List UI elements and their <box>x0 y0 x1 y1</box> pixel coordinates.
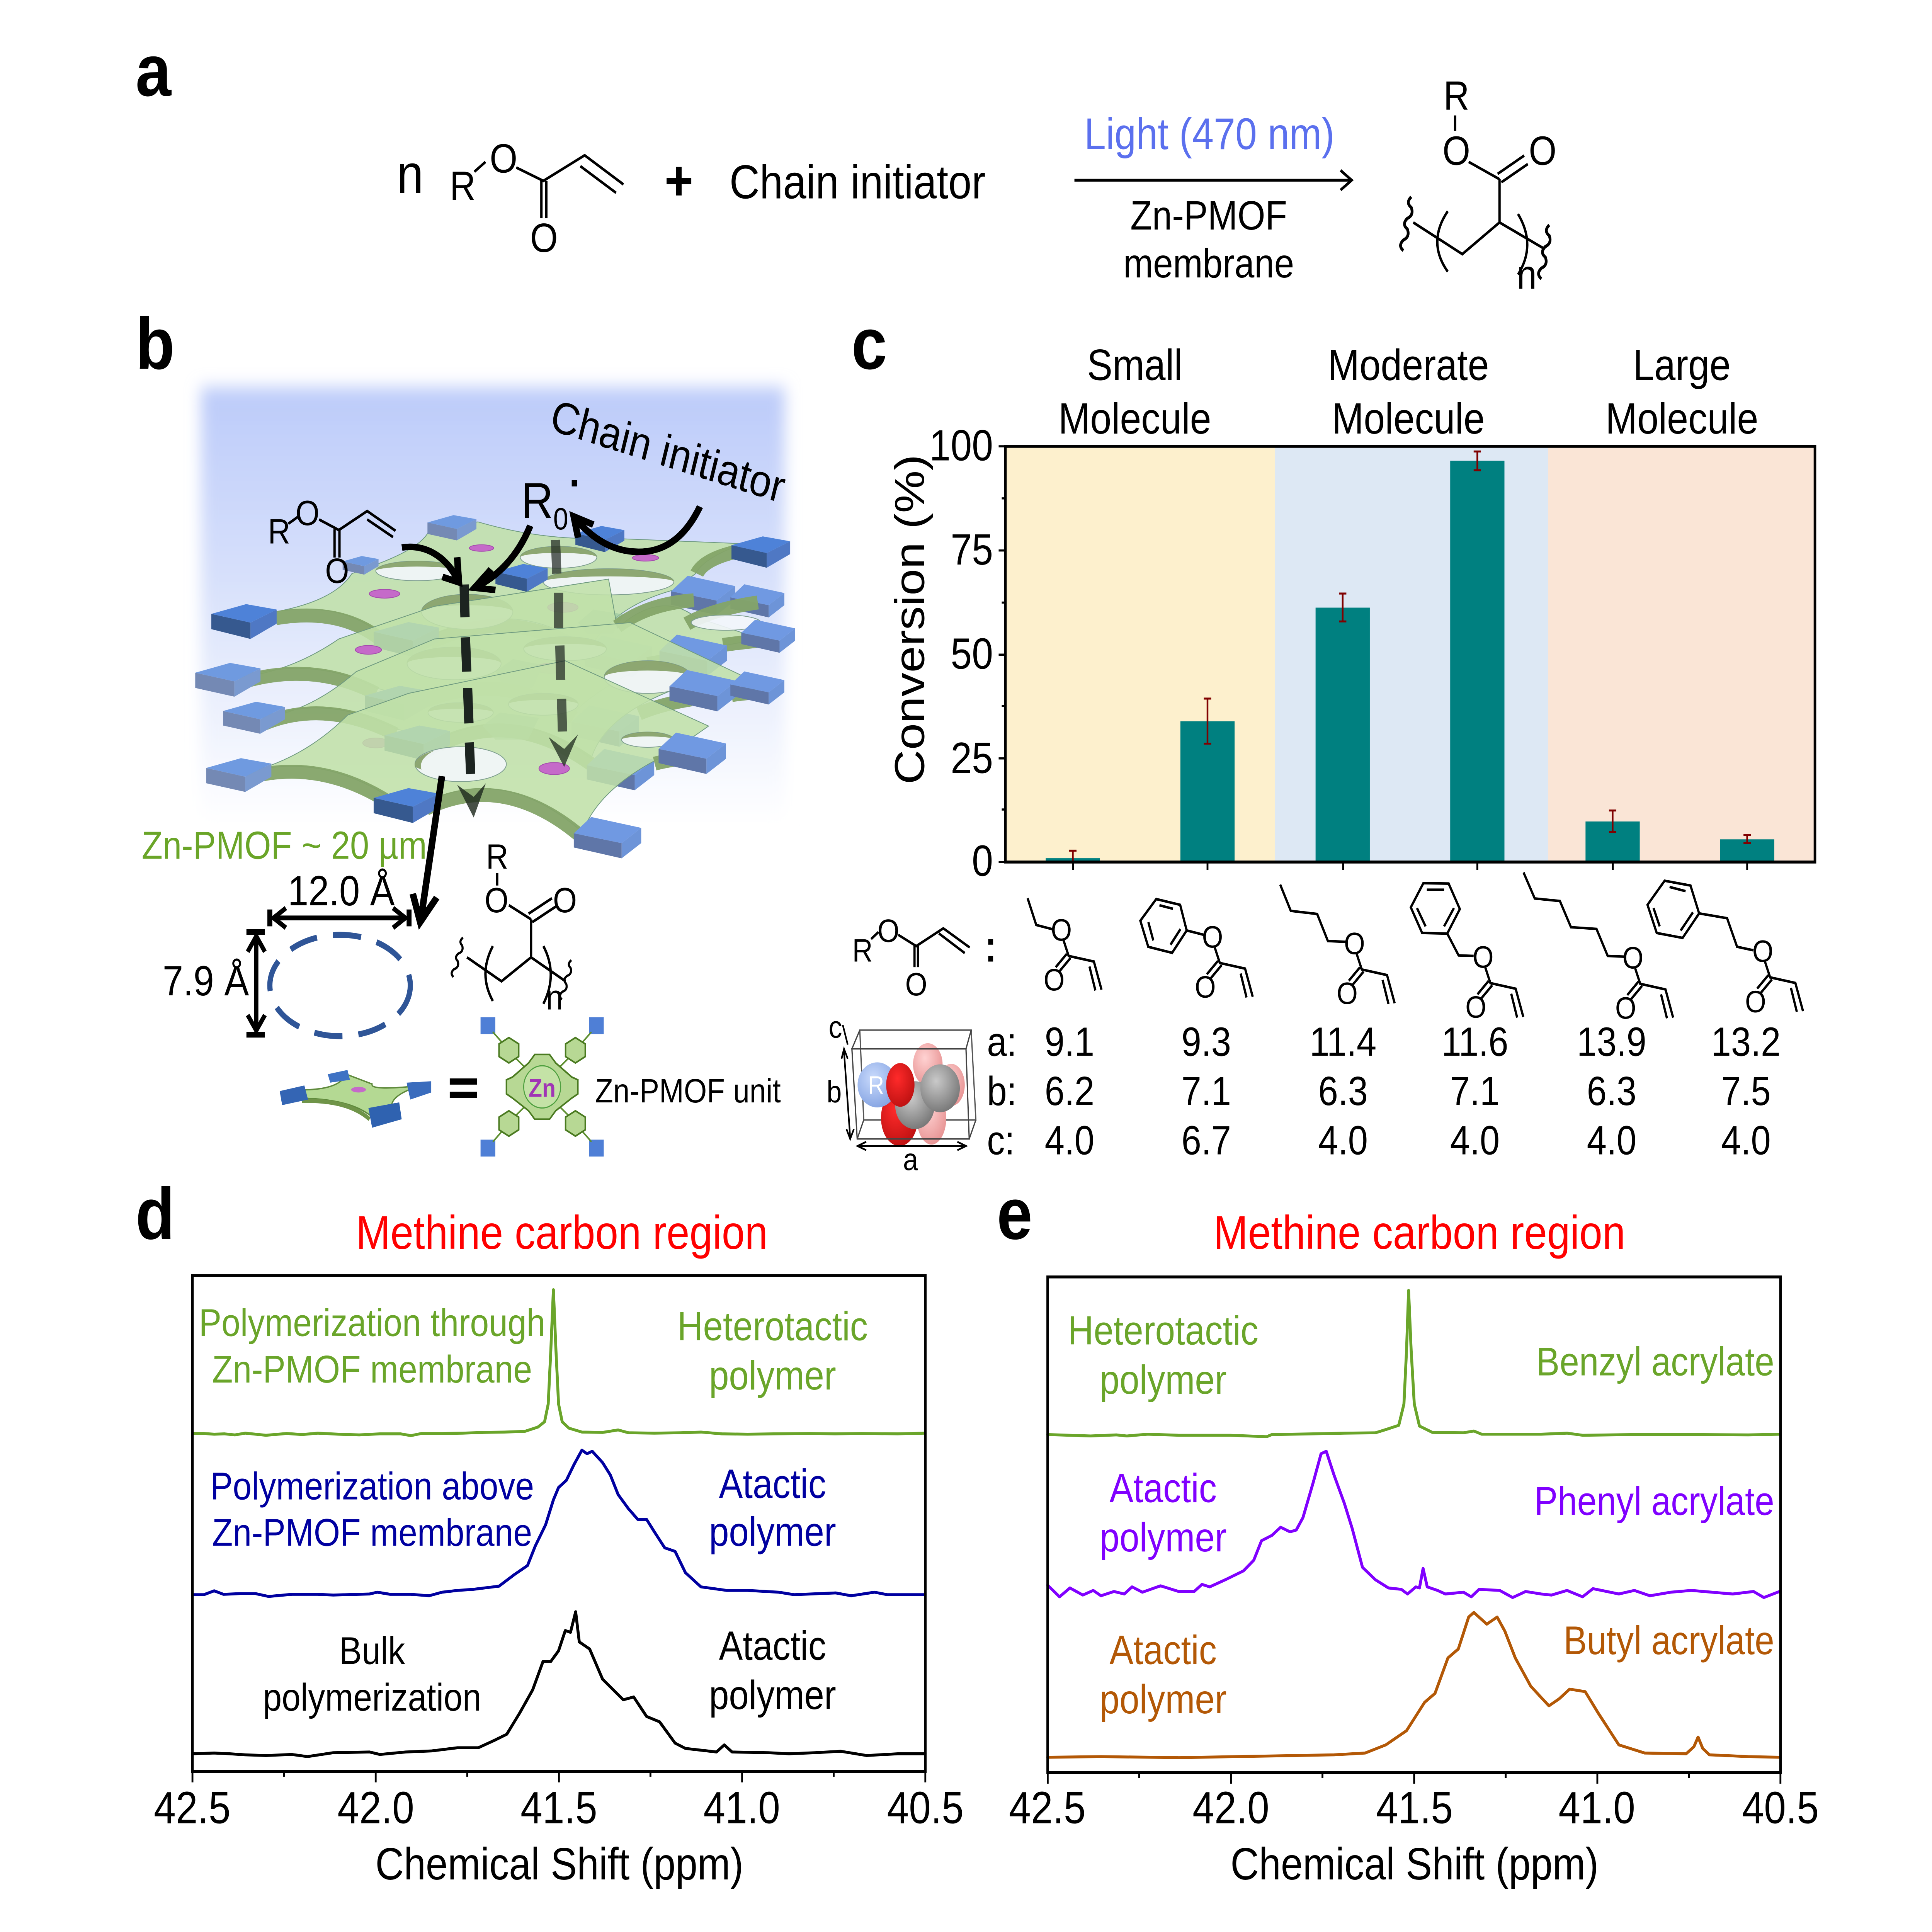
dashed pore outline <box>270 935 410 1036</box>
x axis tick labels: 41.5 <box>520 1783 597 1833</box>
polymer in pore structure <box>446 837 578 1017</box>
category heading: small molecule: Small <box>1087 341 1182 389</box>
unit cell model with space-filling atoms: a <box>903 1142 918 1177</box>
panel e title: Methine carbon region <box>1213 1206 1625 1259</box>
y axis title: Conversion (%) <box>886 454 933 784</box>
row a dimensions <box>987 1019 1781 1065</box>
panel c: conversion bar chart <box>886 341 1815 885</box>
sheet layer 3 <box>223 622 784 790</box>
initiator radical R0: R <box>521 473 553 529</box>
row c dimensions: c: <box>987 1118 1015 1163</box>
row a dimensions: 11.6 <box>1441 1019 1509 1065</box>
x axis title: Chemical Shift (ppm) <box>375 1839 743 1889</box>
label: butyl acrylate: Butyl acrylate <box>1563 1618 1774 1663</box>
label: atactic polymer black: Atactic <box>719 1623 826 1669</box>
panel label c: c <box>851 303 887 384</box>
catalyst label: membrane <box>1123 241 1294 286</box>
label: heterotactic polymer: Heterotactic <box>1068 1308 1259 1354</box>
generic acrylate structure <box>852 913 993 1002</box>
row c dimensions: 4.0 <box>1318 1118 1368 1163</box>
polymer in pore structure: O <box>485 881 509 920</box>
monomer 2 phenyl acrylate: O <box>1202 920 1223 954</box>
panel e: NMR spectra <box>1009 1277 1819 1889</box>
y axis tick labels: 50 <box>951 630 993 678</box>
polymer in pore structure: O <box>553 881 577 920</box>
row c dimensions: 4.0 <box>1045 1118 1094 1163</box>
label: atactic polymer black: polymer <box>709 1673 836 1718</box>
polymer product structure: O <box>1529 128 1556 174</box>
row b dimensions: 7.5 <box>1721 1068 1771 1114</box>
category heading: moderate molecule: Moderate <box>1328 341 1489 389</box>
layered Zn-PMOF sheets <box>195 507 795 922</box>
row b dimensions: 7.1 <box>1182 1068 1231 1114</box>
x axis tick labels: 42.0 <box>337 1783 414 1833</box>
monomer above membrane: O <box>296 494 320 533</box>
unit cell model with space-filling atoms: R <box>868 1071 884 1100</box>
porphyrin unit structure: Zn <box>529 1074 556 1102</box>
row c dimensions: 6.7 <box>1182 1118 1231 1163</box>
row c dimensions: 4.0 <box>1450 1118 1500 1163</box>
catalyst label: Zn-PMOF <box>1130 193 1287 238</box>
x axis title: Chemical Shift (ppm) <box>1230 1839 1599 1889</box>
x axis tick labels: 42.0 <box>1192 1783 1269 1833</box>
category heading: small molecule: Molecule <box>1058 395 1211 443</box>
row a dimensions: a: <box>987 1019 1017 1065</box>
plus sign: + <box>665 149 693 212</box>
polymer product structure: R <box>1444 73 1469 119</box>
label: polymerization through membrane: Polymerization through <box>199 1301 545 1344</box>
acrylate monomer structure: O <box>530 215 558 261</box>
monomer 1 ethyl acrylate: O <box>1044 963 1065 997</box>
category heading: moderate molecule: Molecule <box>1332 395 1485 443</box>
initiator radical R0 <box>521 473 577 536</box>
arrow down to pore detail <box>413 776 442 922</box>
sheet layer 2 <box>195 579 795 747</box>
label: benzyl acrylate: Benzyl acrylate <box>1536 1339 1774 1384</box>
row a dimensions: 9.1 <box>1045 1019 1094 1065</box>
unit cell model with space-filling atoms: c <box>828 1010 842 1044</box>
unit cell model with space-filling atoms: b <box>827 1075 842 1109</box>
panel a: reaction scheme <box>397 73 1559 298</box>
spectra traces <box>192 1290 925 1757</box>
x axis tick labels: 42.5 <box>1009 1783 1086 1833</box>
monomer above membrane: R <box>268 512 290 551</box>
monomer 5 hexyl acrylate: O <box>1615 991 1636 1025</box>
monomer 5 hexyl acrylate <box>1524 872 1673 1025</box>
y axis tick labels: 75 <box>951 526 993 574</box>
unit cell model with space-filling atoms <box>827 1010 976 1177</box>
membrane thickness label: Zn-PMOF ~ 20 µm <box>142 824 427 867</box>
monomer 6 phenethyl acrylate: O <box>1752 934 1773 968</box>
reaction arrow <box>1075 170 1352 190</box>
green trace <box>1048 1291 1781 1437</box>
pore width dimension <box>270 867 409 928</box>
monomer 1 ethyl acrylate: O <box>1051 913 1072 947</box>
monomer 3 butyl acrylate: O <box>1344 926 1365 961</box>
category heading: large molecule: Molecule <box>1605 395 1758 443</box>
equals sign <box>450 1078 477 1098</box>
panel b: MOF membrane schematic <box>142 387 795 1156</box>
label: polymerization through membrane: Zn-PMOF membrane <box>212 1347 532 1391</box>
sheet layer 4 <box>206 661 726 858</box>
spectra traces <box>1048 1291 1781 1758</box>
lattice dimension table <box>987 1019 1781 1163</box>
error bars <box>1069 451 1751 862</box>
label: atactic polymer brown: polymer <box>1100 1677 1227 1723</box>
monomer 3 butyl acrylate <box>1280 884 1395 1010</box>
monomer 6 phenethyl acrylate <box>1648 881 1803 1019</box>
x axis tick labels: 42.5 <box>154 1783 231 1833</box>
row b dimensions: 7.1 <box>1450 1068 1500 1114</box>
x axis tick labels: 41.0 <box>1558 1783 1635 1833</box>
black trace <box>192 1612 925 1757</box>
label: phenyl acrylate: Phenyl acrylate <box>1534 1479 1774 1524</box>
label: atactic polymer purple: Atactic <box>1109 1466 1217 1511</box>
label: atactic polymer brown: Atactic <box>1109 1628 1217 1673</box>
monomer 2 phenyl acrylate: O <box>1195 969 1216 1004</box>
monomer coefficient n: n <box>397 143 423 205</box>
green trace <box>192 1290 925 1435</box>
row b dimensions: 6.3 <box>1318 1068 1368 1114</box>
row a dimensions: 11.4 <box>1310 1019 1376 1065</box>
panel label d: d <box>136 1173 175 1255</box>
polymer in pore structure: R <box>486 837 508 876</box>
generic acrylate structure: O <box>878 913 900 949</box>
y axis tick labels <box>929 421 993 885</box>
y axis tick labels: 100 <box>929 421 993 470</box>
y axis tick labels: 25 <box>951 734 993 782</box>
row c dimensions: 4.0 <box>1721 1118 1771 1163</box>
light wavelength label: Light (470 nm) <box>1084 109 1335 159</box>
monomer 4 benzyl acrylate: O <box>1473 940 1494 974</box>
label: atactic polymer blue: polymer <box>709 1509 836 1555</box>
light blue gradient backdrop <box>201 387 785 823</box>
chain initiator label: Chain initiator <box>730 155 986 209</box>
monomer above membrane <box>268 494 396 591</box>
category heading: large molecule: Large <box>1633 341 1731 389</box>
purple trace <box>1048 1451 1781 1597</box>
monomer 5 hexyl acrylate: O <box>1622 940 1643 975</box>
monomer 1 ethyl acrylate <box>1027 898 1102 997</box>
row a dimensions: 13.9 <box>1577 1019 1646 1065</box>
teal bars <box>1046 461 1774 862</box>
label: heterotactic polymer: polymer <box>1100 1357 1227 1403</box>
label: atactic polymer blue: Atactic <box>719 1461 826 1507</box>
row a dimensions: 13.2 <box>1711 1019 1781 1065</box>
y axis tick labels: 0 <box>972 837 993 885</box>
row b dimensions: 6.2 <box>1045 1068 1094 1114</box>
label: bulk polymerization: polymerization <box>263 1675 481 1719</box>
panel d title: Methine carbon region <box>356 1206 768 1259</box>
pore channel strands and arrowheads <box>457 540 578 818</box>
Zn-PMOF unit label: Zn-PMOF unit <box>595 1072 781 1110</box>
row c dimensions: 4.0 <box>1587 1118 1636 1163</box>
label: atactic polymer purple: polymer <box>1100 1515 1227 1561</box>
polymer product structure: n <box>1517 252 1537 298</box>
monomer 4 benzyl acrylate: O <box>1465 990 1486 1024</box>
polymer in pore structure: n <box>546 978 563 1017</box>
Zn-PMOF unit sheet icon <box>280 1070 431 1128</box>
porphyrin unit structure <box>481 1017 604 1156</box>
x axis tick labels <box>1009 1783 1819 1833</box>
x axis tick labels: 40.5 <box>887 1783 964 1833</box>
label: heterotactic polymer: Heterotactic <box>677 1304 868 1349</box>
pore height dimension <box>163 932 265 1035</box>
x axis tick labels: 41.0 <box>703 1783 780 1833</box>
monomer 3 butyl acrylate: O <box>1337 976 1358 1010</box>
monomer 6 phenethyl acrylate: O <box>1745 984 1766 1019</box>
brown trace <box>1048 1612 1781 1758</box>
polymer product structure: O <box>1442 128 1470 174</box>
plot frame and ticks <box>1048 1277 1781 1784</box>
label: polymerization above membrane: Zn-PMOF membrane <box>212 1511 532 1554</box>
sheet layer 1 <box>211 515 790 677</box>
acrylate monomer structure: R <box>450 163 476 209</box>
initiator radical R0: 0 <box>553 502 568 536</box>
chain initiator curved label: Chain initiator <box>546 391 790 512</box>
monomer above membrane: O <box>325 552 349 591</box>
row b dimensions: b: <box>987 1068 1017 1114</box>
background size bands <box>1005 446 1815 862</box>
blue trace <box>192 1450 925 1597</box>
acrylate monomer structure: O <box>490 136 517 182</box>
row b dimensions: 6.3 <box>1587 1068 1636 1114</box>
monomer 4 benzyl acrylate <box>1411 883 1523 1024</box>
panel label e: e <box>997 1173 1032 1255</box>
x axis tick labels: 41.5 <box>1376 1783 1453 1833</box>
panel d: NMR spectra <box>154 1276 964 1889</box>
plot frame and ticks <box>192 1276 925 1782</box>
row a dimensions: 9.3 <box>1182 1019 1231 1065</box>
label: bulk polymerization: Bulk <box>339 1629 405 1672</box>
row c dimensions <box>987 1118 1771 1163</box>
acrylate monomer structure <box>450 136 624 261</box>
x axis tick labels: 40.5 <box>1742 1783 1819 1833</box>
x axis tick labels <box>154 1783 964 1833</box>
pore width dimension: 12.0 Å <box>288 867 395 914</box>
label: heterotactic polymer: polymer <box>709 1353 836 1399</box>
panel label b: b <box>136 303 175 384</box>
label: polymerization above membrane: Polymerization above <box>210 1464 534 1508</box>
polymer product structure <box>1393 73 1559 298</box>
plot axes and ticks <box>999 446 1815 870</box>
generic acrylate structure: R <box>852 932 873 969</box>
row b dimensions <box>987 1068 1771 1114</box>
curved arrows toward pore <box>402 507 700 590</box>
pore height dimension: 7.9 Å <box>163 957 249 1004</box>
panel label a: a <box>136 29 172 111</box>
generic acrylate structure: O <box>905 966 927 1002</box>
monomer 2 phenyl acrylate <box>1140 899 1253 1004</box>
